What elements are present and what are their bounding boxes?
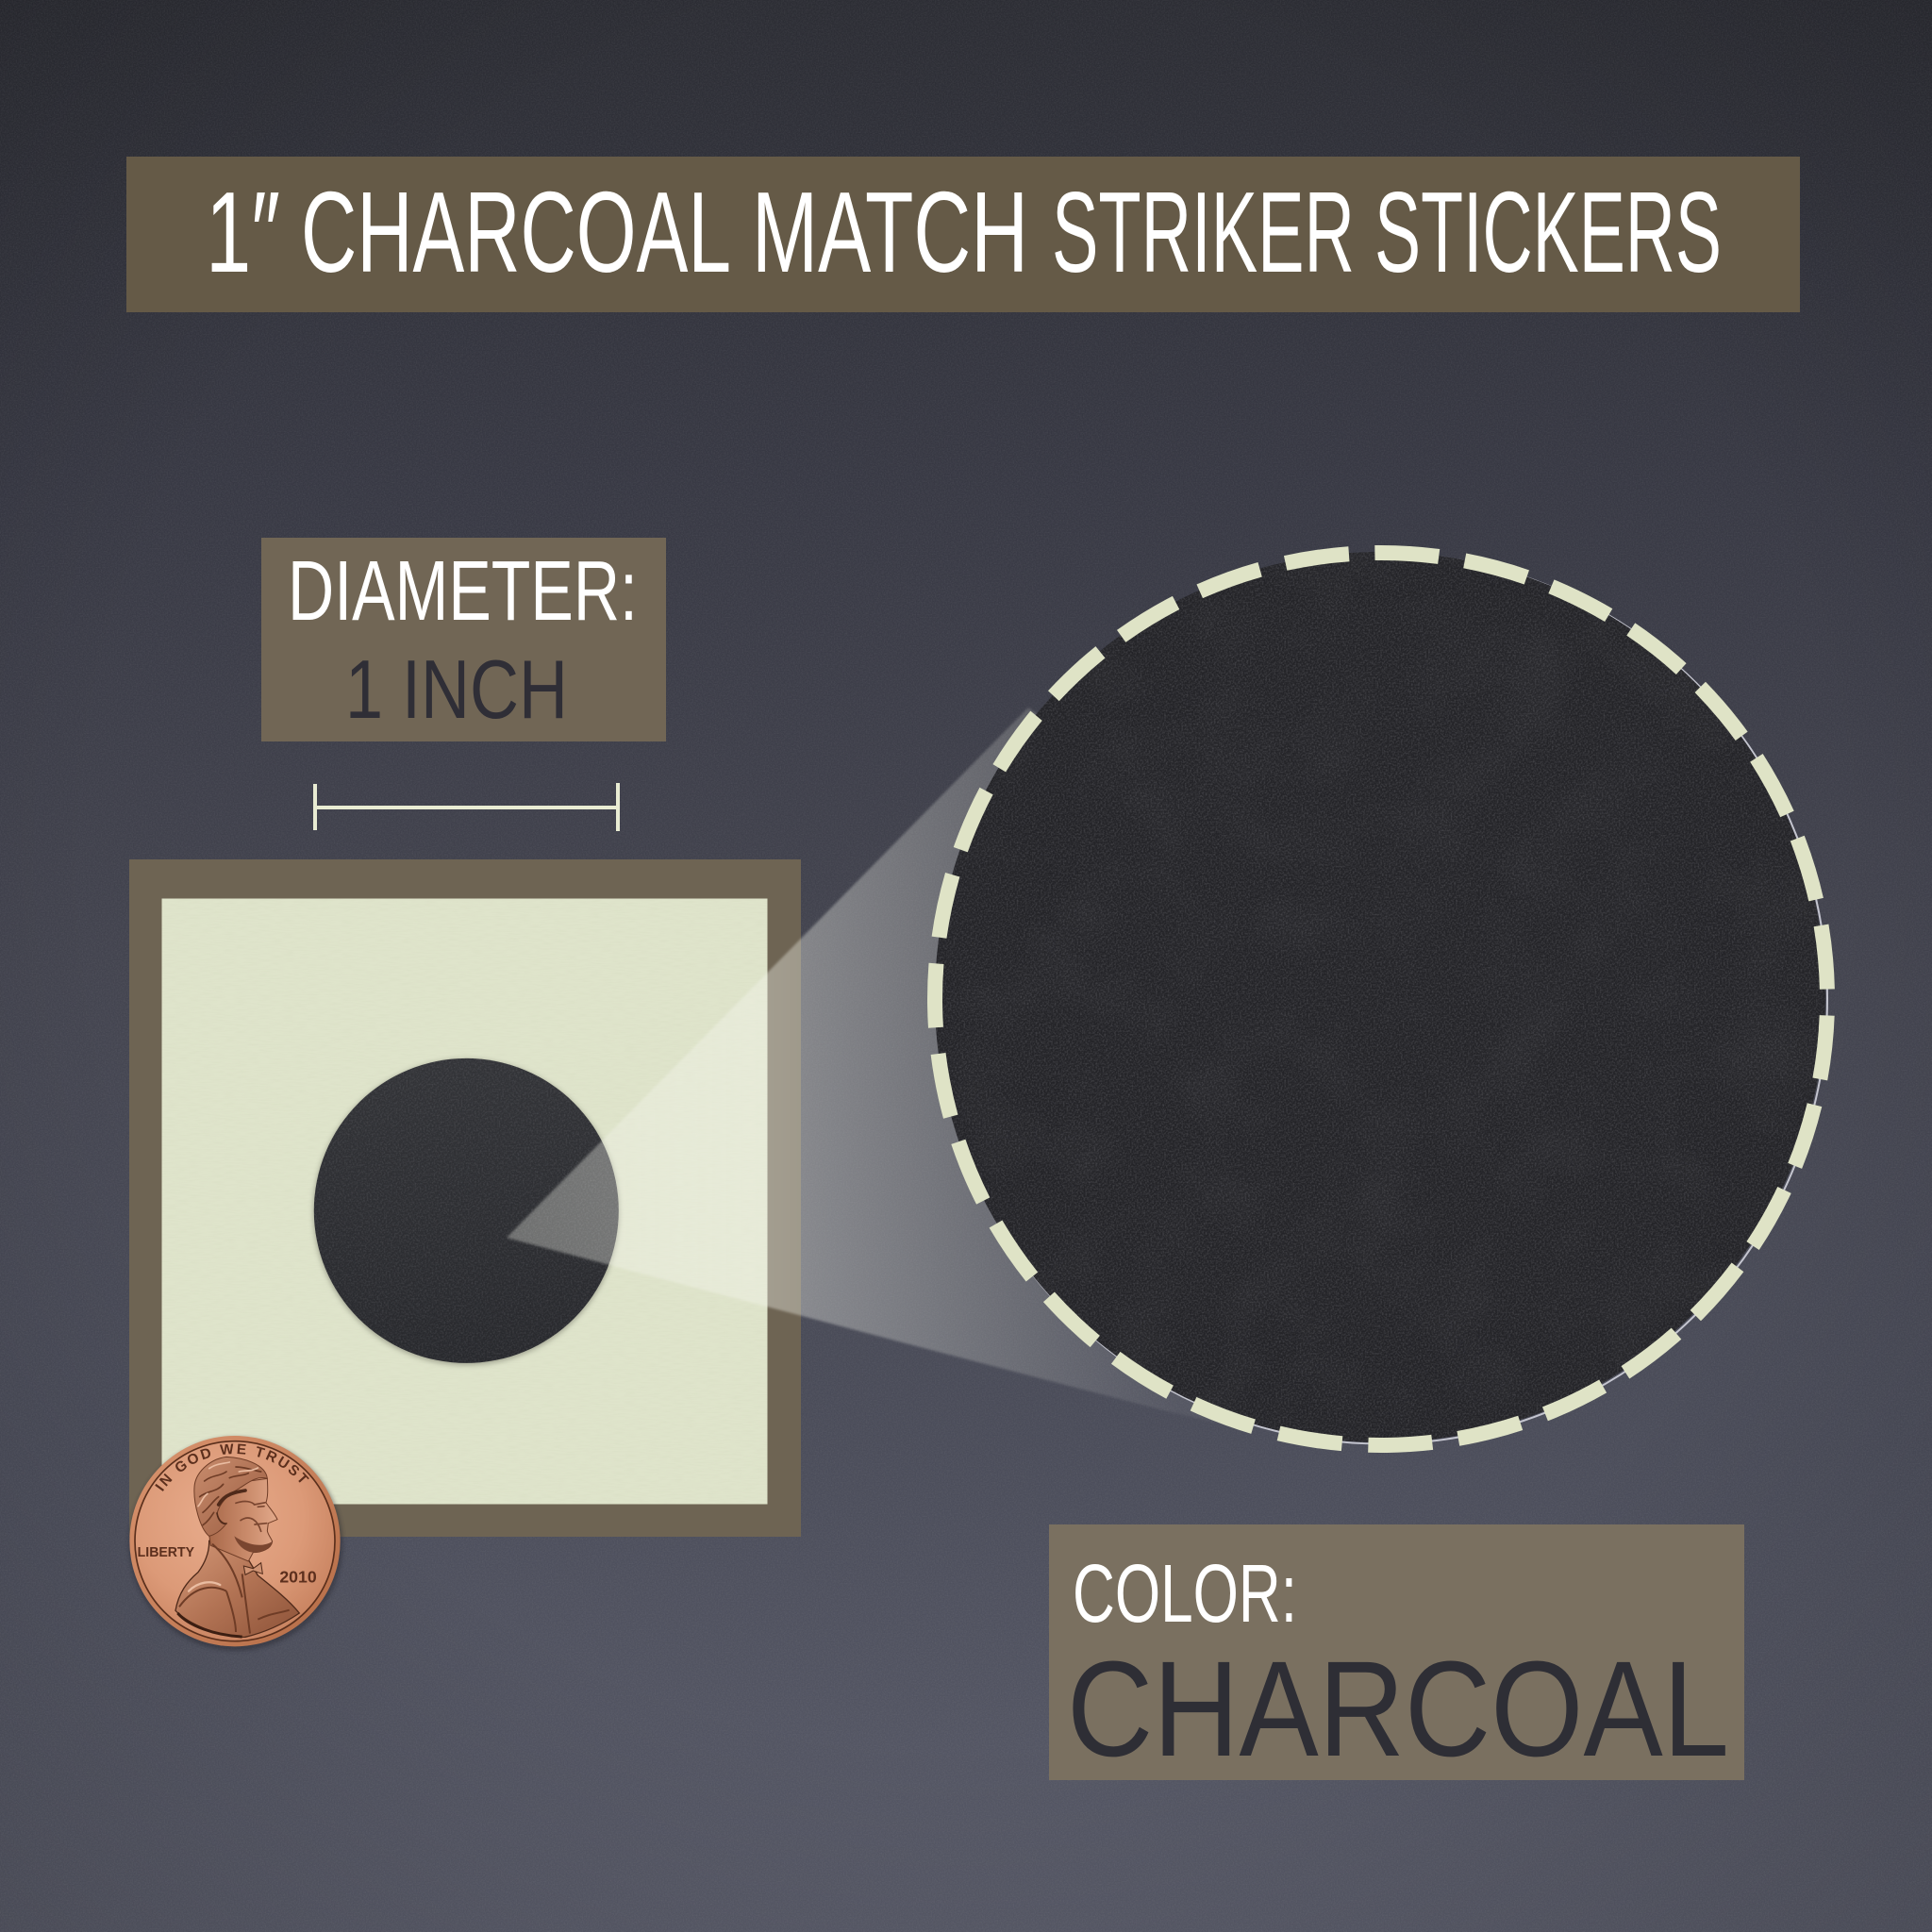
coin motto: IN GOD WE TRUST	[155, 1443, 309, 1491]
magnified sticker	[928, 546, 1834, 1452]
panel: colour label	[1049, 1524, 1744, 1785]
panel: diameter label	[261, 538, 666, 741]
neck and face	[209, 1478, 277, 1561]
dashed cut line	[928, 546, 1834, 1452]
title banner: MATCH	[752, 168, 1028, 296]
title banner: CHARCOAL	[301, 168, 731, 296]
panel: diameter label: DIAMETER:	[288, 544, 638, 639]
beard	[234, 1536, 273, 1553]
icon: penny for scale	[128, 1434, 343, 1651]
panel: sticker sheet	[129, 859, 801, 1537]
title banner: 1″	[206, 168, 280, 296]
panel: colour label: COLOR:	[1073, 1548, 1297, 1640]
panel: colour label: CHARCOAL	[1067, 1633, 1729, 1785]
jacket	[175, 1541, 299, 1637]
hair	[194, 1457, 267, 1536]
magnification beam	[507, 708, 1226, 1424]
bow tie	[243, 1563, 262, 1574]
title banner	[126, 157, 1800, 312]
jacket folds	[179, 1544, 290, 1634]
backing paper	[162, 898, 768, 1504]
thin sticker edge	[937, 553, 1827, 1443]
scale bar: one inch	[313, 783, 620, 831]
sheet border	[129, 859, 801, 1537]
face wrinkles and eye	[236, 1502, 267, 1531]
coin liberty: LIBERTY	[138, 1545, 194, 1560]
lincoln bust	[175, 1457, 299, 1637]
coin year: 2010	[279, 1567, 317, 1586]
actual size sticker	[311, 1057, 623, 1368]
coin rim	[129, 1436, 341, 1646]
title banner: STRIKER	[1052, 168, 1355, 296]
panel: diameter label: 1 INCH	[345, 642, 568, 736]
